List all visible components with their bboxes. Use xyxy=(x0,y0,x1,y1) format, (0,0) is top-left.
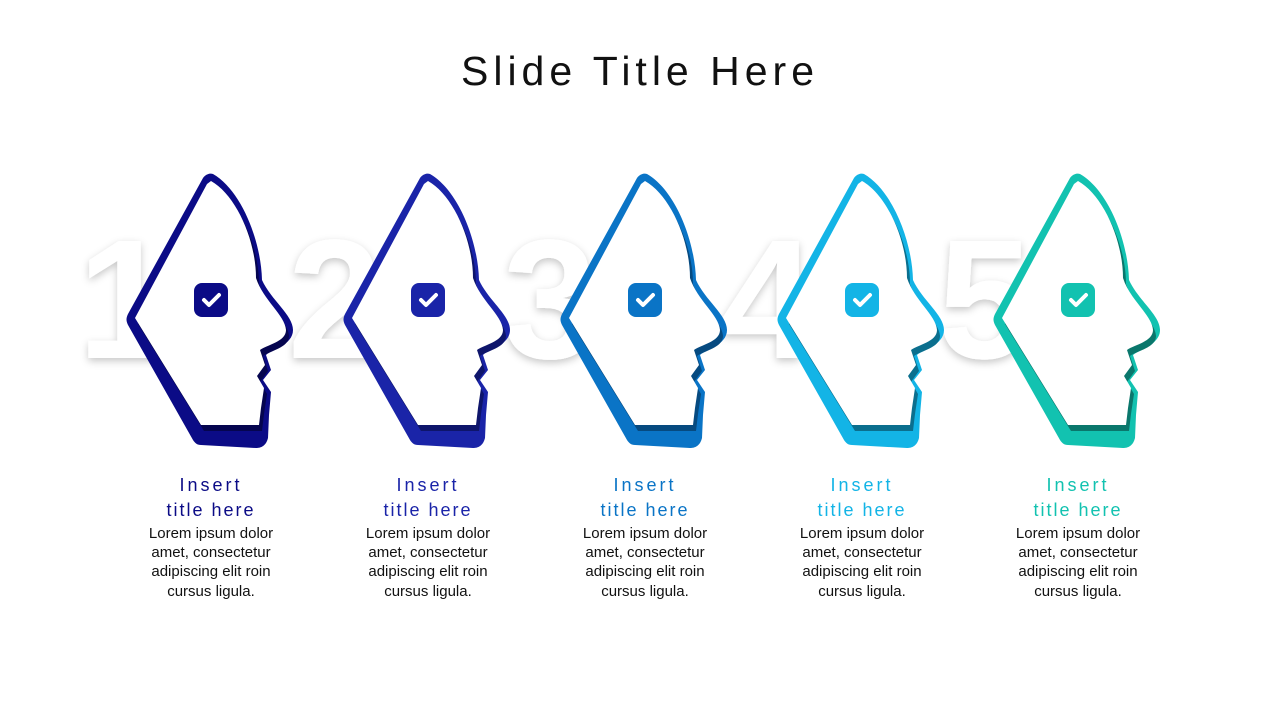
text block 3: amet, consectetur xyxy=(585,544,705,561)
text block 3 xyxy=(583,475,707,600)
text block 3: Insert xyxy=(613,475,677,495)
text block 3: Lorem ipsum dolor xyxy=(583,525,707,542)
text block 1: title here xyxy=(166,500,256,520)
text block 1: amet, consectetur xyxy=(151,544,271,561)
big numbers: 2 xyxy=(288,205,382,395)
icon: check xyxy=(628,283,662,317)
text block 2: amet, consectetur xyxy=(368,544,488,561)
face 2 xyxy=(344,174,510,448)
text block 5: title here xyxy=(1033,500,1123,520)
text block 4: adipiscing elit roin xyxy=(802,563,922,580)
text block 2: cursus ligula. xyxy=(384,583,472,600)
text block 2 xyxy=(366,475,490,600)
text block 3: adipiscing elit roin xyxy=(585,563,705,580)
text block 4 xyxy=(800,475,924,600)
face 3 xyxy=(560,174,727,448)
face 4 xyxy=(778,174,944,448)
title: Slide Title Here xyxy=(461,48,819,94)
icon: check xyxy=(845,283,879,317)
big numbers: 5 xyxy=(938,205,1032,395)
big numbers xyxy=(78,205,1032,395)
text block 5: amet, consectetur xyxy=(1018,544,1138,561)
big numbers: 4 xyxy=(721,205,815,395)
text block 4: amet, consectetur xyxy=(802,544,922,561)
big numbers: 1 xyxy=(78,205,172,395)
text block 5 xyxy=(1016,475,1140,600)
face 5 xyxy=(994,174,1160,448)
text block 5: Lorem ipsum dolor xyxy=(1016,525,1140,542)
text block 1: adipiscing elit roin xyxy=(151,563,271,580)
text block 2: Lorem ipsum dolor xyxy=(366,525,490,542)
text block 4: title here xyxy=(817,500,907,520)
text block 2: adipiscing elit roin xyxy=(368,563,488,580)
face 1 xyxy=(126,174,293,448)
text block 4: Lorem ipsum dolor xyxy=(800,525,924,542)
text block 1: Lorem ipsum dolor xyxy=(149,525,273,542)
text block 1 xyxy=(149,475,273,600)
text block 4: Insert xyxy=(830,475,894,495)
text block 5: cursus ligula. xyxy=(1034,583,1122,600)
big numbers: 3 xyxy=(503,205,597,395)
text block 3: cursus ligula. xyxy=(601,583,689,600)
text block 3: title here xyxy=(600,500,690,520)
text block 1: Insert xyxy=(179,475,243,495)
text block 4: cursus ligula. xyxy=(818,583,906,600)
text block 5: adipiscing elit roin xyxy=(1018,563,1138,580)
icon: check xyxy=(1061,283,1095,317)
icon: check xyxy=(411,283,445,317)
icon: check xyxy=(194,283,228,317)
text block 2: Insert xyxy=(396,475,460,495)
text block 1: cursus ligula. xyxy=(167,583,255,600)
text block 5: Insert xyxy=(1046,475,1110,495)
text block 2: title here xyxy=(383,500,473,520)
